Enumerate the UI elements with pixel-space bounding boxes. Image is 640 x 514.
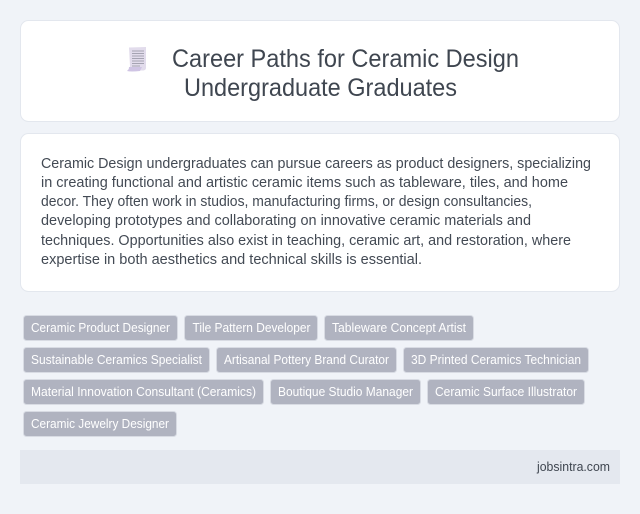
tag: Material Innovation Consultant (Ceramics) [31, 385, 256, 399]
tag [324, 316, 474, 340]
tag: Artisanal Pottery Brand Curator [224, 353, 389, 367]
heading: Career Paths for Ceramic Design [172, 45, 519, 73]
tag [270, 380, 420, 404]
tag [24, 316, 178, 340]
tag [24, 380, 264, 404]
tag [24, 412, 176, 436]
panel: description [20, 134, 620, 292]
tag [404, 348, 588, 372]
text block: description: decor. They often work in studios, manufacturing firms, or design consultancies, [41, 194, 532, 210]
icon: document scroll [127, 47, 146, 72]
tag list [24, 316, 588, 436]
tag: 3D Printed Ceramics Technician [411, 353, 581, 367]
heading [172, 45, 519, 102]
panel: title card [20, 20, 620, 122]
tag: Boutique Studio Manager [278, 385, 413, 399]
tag: Ceramic Jewelry Designer [31, 417, 169, 431]
text block: description: Ceramic Design undergraduates can pursue careers as product designers, specializing [41, 156, 591, 172]
footer text: jobsintra.com [536, 460, 610, 474]
tag: Ceramic Surface Illustrator [435, 385, 577, 399]
tag [428, 380, 584, 404]
tag: Ceramic Product Designer [31, 321, 170, 335]
text block: description: expertise in both aesthetics and technical skills is essential. [41, 252, 422, 268]
text block: description [41, 156, 591, 268]
heading: Undergraduate Graduates [184, 74, 457, 102]
text block: description: techniques. Opportunities also exist in teaching, ceramic art, and restoration, where [41, 233, 571, 249]
tag: Tile Pattern Developer [192, 321, 310, 335]
tag [184, 316, 318, 340]
tag [216, 348, 396, 372]
tag: Sustainable Ceramics Specialist [31, 353, 202, 367]
text block: description: in creating functional and artistic ceramic items such as tableware, tiles, and home [41, 175, 568, 191]
text block: description: developing prototypes and collaborating on innovative ceramic materials and [41, 213, 531, 229]
footer bar [20, 450, 620, 484]
tag [24, 348, 210, 372]
tag: Tableware Concept Artist [332, 321, 467, 335]
